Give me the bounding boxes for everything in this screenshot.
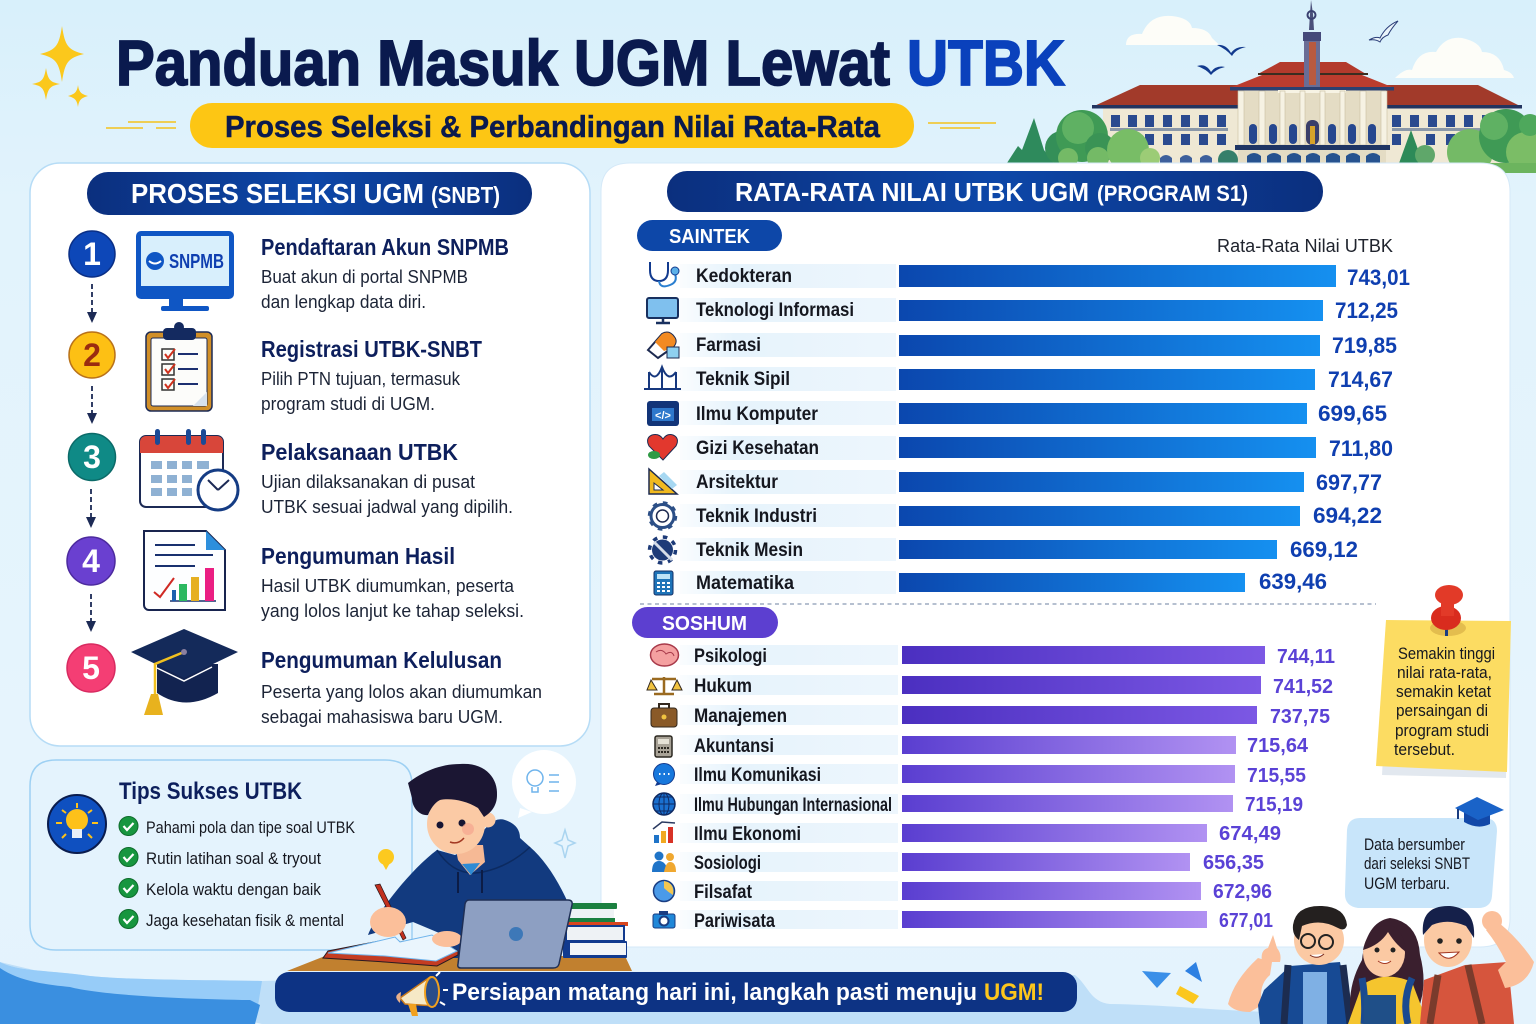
row: Hukum: Hukum bbox=[694, 676, 752, 697]
number 2 bbox=[69, 332, 115, 378]
student girl bbox=[1348, 918, 1428, 1024]
row: Gizi Kesehatan bbox=[648, 434, 1393, 461]
desk bbox=[287, 956, 632, 971]
checklist: Jaga kesehatan fisik & mental bbox=[146, 912, 344, 930]
number 4: 4 bbox=[82, 543, 100, 579]
step 1: dan lengkap data diri. bbox=[261, 291, 426, 312]
number 3 bbox=[68, 434, 116, 480]
label: SOSHUM: SOSHUM bbox=[662, 613, 747, 635]
illustration: studying student bbox=[287, 750, 632, 971]
row: Teknik Mesin bbox=[650, 537, 1358, 563]
step 3: UTBK sesuai jadwal yang dipilih. bbox=[261, 496, 513, 517]
chart: soshum bars bbox=[647, 644, 1335, 932]
number 5: 5 bbox=[82, 650, 100, 686]
row: Teknologi Informasi bbox=[647, 298, 1398, 323]
row: Kedokteran bbox=[650, 262, 1410, 290]
illustration: three students bbox=[1228, 906, 1534, 1024]
step 5: sebagai mahasiswa baru UGM. bbox=[261, 706, 503, 727]
row: Matematika bbox=[654, 569, 1327, 595]
chart: saintek bars bbox=[644, 262, 1410, 595]
label: SOSHUM bbox=[632, 607, 778, 638]
heading: process bbox=[87, 172, 532, 215]
row: Farmasi: Farmasi bbox=[696, 335, 761, 356]
callout: sticky note: tersebut. bbox=[1394, 741, 1455, 759]
callout: sticky note: program studi bbox=[1395, 722, 1489, 740]
icon: small bulb bbox=[378, 849, 394, 870]
callout: data source: UGM terbaru. bbox=[1364, 875, 1450, 893]
row: Filsafat: 672,96 bbox=[1213, 880, 1272, 903]
subtitle banner bbox=[106, 103, 996, 148]
label: SAINTEK: SAINTEK bbox=[669, 226, 751, 248]
books stack bbox=[563, 903, 628, 958]
row: Arsitektur bbox=[649, 469, 1382, 495]
wings bbox=[1103, 107, 1238, 165]
title: Panduan Masuk UGM Lewat bbox=[116, 27, 890, 99]
row: Ilmu Komputer bbox=[647, 401, 1387, 426]
checklist: Pahami pola dan tipe soal UTBK bbox=[146, 819, 355, 837]
step 2 bbox=[69, 322, 482, 414]
row: Psikologi: Psikologi bbox=[694, 646, 767, 667]
row: Matematika: Matematika bbox=[696, 573, 794, 594]
row: Ilmu Ekonomi bbox=[653, 822, 1281, 845]
callout: sticky note bbox=[1376, 585, 1511, 778]
row: Ilmu Hubungan Internasional: Ilmu Hubungan Internasional bbox=[694, 795, 892, 816]
row: Kedokteran: 743,01 bbox=[1347, 265, 1410, 290]
tower bbox=[1309, 0, 1314, 30]
icon: graduation cap bbox=[131, 629, 238, 715]
checklist: Kelola waktu dengan baik bbox=[146, 881, 322, 899]
row: Akuntansi: 715,64 bbox=[1247, 734, 1309, 757]
row: Ilmu Komunikasi bbox=[654, 764, 1306, 787]
row: Ilmu Hubungan Internasional bbox=[653, 793, 1303, 816]
row: Teknik Industri bbox=[650, 503, 1382, 529]
row: Ilmu Hubungan Internasional: 715,19 bbox=[1245, 793, 1303, 816]
step 3: Pelaksanaan UTBK bbox=[261, 439, 458, 465]
number 4 bbox=[67, 537, 115, 585]
title: UTBK bbox=[907, 27, 1065, 99]
row: Ilmu Ekonomi: Ilmu Ekonomi bbox=[694, 824, 801, 845]
hands and pen bbox=[370, 884, 462, 947]
laptop bbox=[458, 900, 572, 968]
row: Teknik Industri: Teknik Industri bbox=[696, 506, 817, 527]
icon: calendar with clock bbox=[140, 429, 238, 510]
row: Ilmu Komunikasi: Ilmu Komunikasi bbox=[694, 765, 821, 786]
heading: scores bbox=[667, 171, 1323, 212]
axis label: Rata-Rata Nilai UTBK bbox=[1217, 235, 1394, 256]
row: Ilmu Ekonomi: 674,49 bbox=[1219, 822, 1281, 845]
step 4: yang lolos lanjut ke tahap seleksi. bbox=[261, 600, 524, 621]
heading: scores: (PROGRAM S1) bbox=[1097, 181, 1248, 206]
icon: birds bbox=[1197, 21, 1398, 75]
number 2: 2 bbox=[83, 337, 101, 373]
head bbox=[408, 764, 497, 875]
footer banner: Persiapan matang hari ini, langkah pasti menuju bbox=[452, 979, 977, 1006]
row: Gizi Kesehatan: 711,80 bbox=[1329, 436, 1393, 461]
row: Farmasi bbox=[648, 333, 1397, 358]
row: Filsafat: Filsafat bbox=[694, 882, 753, 903]
step 4: Pengumuman Hasil bbox=[261, 543, 455, 569]
student raising fist bbox=[1420, 906, 1534, 1024]
step 2: program studi di UGM. bbox=[261, 393, 435, 414]
row: Pariwisata bbox=[653, 909, 1273, 932]
footer banner: UGM! bbox=[984, 979, 1044, 1006]
row: Filsafat bbox=[654, 880, 1272, 903]
callout: sticky note: semakin ketat bbox=[1396, 683, 1491, 701]
speech bubble with idea bbox=[512, 750, 576, 818]
centre portico bbox=[1238, 88, 1386, 164]
illustration: UGM building with sky bbox=[1005, 0, 1536, 175]
row: Akuntansi: Akuntansi bbox=[694, 736, 774, 757]
arrows between steps bbox=[86, 284, 97, 632]
hoodie bbox=[368, 819, 569, 958]
row: Psikologi: 744,11 bbox=[1277, 645, 1335, 668]
checklist bbox=[119, 816, 355, 930]
row: Teknik Sipil: 714,67 bbox=[1328, 367, 1393, 392]
footer banner bbox=[275, 972, 1077, 1016]
subtitle banner: Proses Seleksi & Perbandingan Nilai Rata-Rata bbox=[225, 109, 881, 144]
row: Pariwisata: Pariwisata bbox=[694, 911, 775, 932]
row: Gizi Kesehatan: Gizi Kesehatan bbox=[696, 438, 819, 459]
row: Psikologi bbox=[650, 644, 1335, 668]
row: Teknologi Informasi: 712,25 bbox=[1335, 298, 1398, 323]
number 1: 1 bbox=[83, 236, 101, 272]
icon: megaphone bbox=[396, 972, 448, 1016]
step 2: Pilih PTN tujuan, termasuk bbox=[261, 368, 461, 389]
panel: average UTBK scores bbox=[601, 163, 1511, 947]
row: Hukum bbox=[647, 675, 1333, 698]
row: Farmasi: 719,85 bbox=[1332, 333, 1397, 358]
step 5: Pengumuman Kelulusan bbox=[261, 647, 502, 673]
step 2: Registrasi UTBK-SNBT bbox=[261, 336, 482, 362]
icon: small cap bbox=[1455, 797, 1504, 827]
trees bbox=[1005, 109, 1536, 175]
icon: clipboard bbox=[146, 322, 212, 411]
row: Arsitektur: 697,77 bbox=[1316, 470, 1382, 495]
row: Teknik Sipil bbox=[644, 367, 1393, 392]
icon: monitor bbox=[136, 231, 234, 311]
row: Manajemen: Manajemen bbox=[694, 706, 787, 727]
row: Ilmu Komputer: 699,65 bbox=[1318, 401, 1387, 426]
row: Sosiologi: 656,35 bbox=[1203, 851, 1264, 874]
step 1: Buat akun di portal SNPMB bbox=[261, 266, 468, 287]
number 5 bbox=[67, 644, 115, 692]
row: Manajemen bbox=[651, 704, 1330, 728]
student with glasses bbox=[1228, 906, 1352, 1024]
heading: scores: RATA-RATA NILAI UTBK UGM bbox=[735, 177, 1089, 207]
checklist: Rutin latihan soal & tryout bbox=[146, 850, 321, 868]
number 3: 3 bbox=[83, 439, 101, 475]
step 5 bbox=[67, 629, 542, 727]
callout: data source: Data bersumber bbox=[1364, 836, 1465, 854]
row: Teknik Mesin: 669,12 bbox=[1290, 537, 1358, 562]
icon: red pushpin bbox=[1430, 585, 1466, 636]
step 3 bbox=[68, 429, 513, 517]
step 5: Peserta yang lolos akan diumumkan bbox=[261, 681, 542, 702]
callout: sticky note: nilai rata-rata, bbox=[1397, 664, 1492, 682]
row: Akuntansi bbox=[655, 734, 1309, 757]
row: Teknik Industri: 694,22 bbox=[1313, 503, 1382, 528]
step 3: Ujian dilaksanakan di pusat bbox=[261, 471, 475, 492]
callout: sticky note: persaingan di bbox=[1396, 702, 1488, 720]
row: Arsitektur: Arsitektur bbox=[696, 472, 779, 493]
callout: data source bbox=[1345, 797, 1504, 908]
row: Manajemen: 737,75 bbox=[1270, 705, 1330, 728]
icon: monitor: SNPMB bbox=[169, 251, 224, 273]
row: Teknik Sipil: Teknik Sipil bbox=[696, 369, 790, 390]
callout: sticky note: Semakin tinggi bbox=[1398, 645, 1495, 663]
row: Ilmu Komputer: Ilmu Komputer bbox=[696, 404, 819, 425]
label: SAINTEK bbox=[637, 220, 782, 251]
icon: light bulb bbox=[48, 795, 106, 853]
row: Sosiologi: Sosiologi bbox=[694, 853, 761, 874]
heading: process: (SNBT) bbox=[431, 182, 500, 208]
open book bbox=[323, 935, 458, 966]
row: Sosiologi bbox=[652, 851, 1264, 874]
callout: data source: dari seleksi SNBT bbox=[1364, 855, 1470, 873]
row: Kedokteran: Kedokteran bbox=[696, 266, 792, 287]
number 1 bbox=[69, 231, 115, 277]
illustration: confetti bbox=[1142, 962, 1202, 1004]
panel: tips bbox=[30, 760, 412, 950]
step 4 bbox=[67, 531, 524, 621]
panel: tips: Tips Sukses UTBK bbox=[119, 778, 303, 805]
icon: sparkles bbox=[32, 26, 88, 107]
row: Pariwisata: 677,01 bbox=[1219, 909, 1273, 932]
row: Ilmu Komputer: </> bbox=[655, 410, 671, 422]
panel: process steps bbox=[30, 163, 590, 746]
icon: report document bbox=[144, 531, 225, 610]
step 4: Hasil UTBK diumumkan, peserta bbox=[261, 575, 515, 596]
icon: clouds bbox=[1126, 16, 1514, 78]
heading: process: PROSES SELEKSI UGM bbox=[131, 178, 424, 209]
row: Ilmu Komunikasi: 715,55 bbox=[1247, 764, 1306, 787]
step 1: Pendaftaran Akun SNPMB bbox=[261, 234, 509, 260]
row: Teknik Mesin: Teknik Mesin bbox=[696, 540, 803, 561]
row: Matematika: 639,46 bbox=[1259, 569, 1327, 594]
row: Teknologi Informasi: Teknologi Informasi bbox=[696, 300, 854, 321]
step 1 bbox=[69, 231, 509, 312]
icon: sparkle bbox=[555, 830, 575, 858]
row: Hukum: 741,52 bbox=[1273, 675, 1333, 698]
